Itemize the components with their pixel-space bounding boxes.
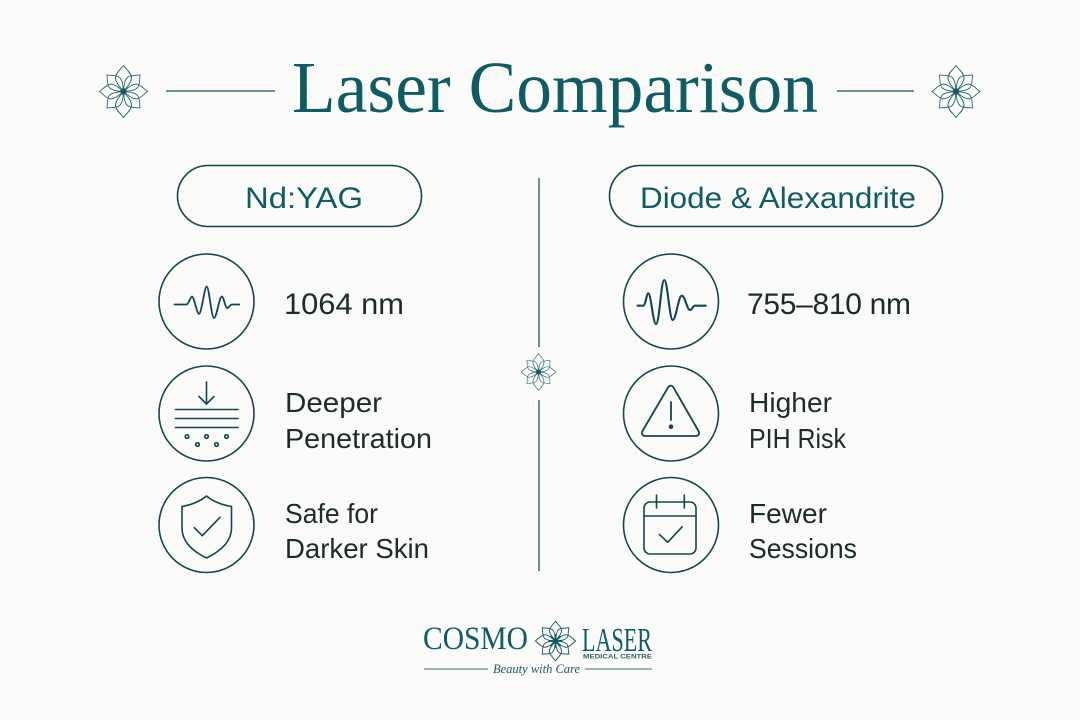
text: Deeper Penetration bbox=[285, 387, 432, 454]
text: Higher PIH Risk: Higher bbox=[749, 387, 832, 418]
text: Safe for Darker Skin: Safe for bbox=[285, 498, 378, 529]
icon: logo flower bbox=[535, 621, 576, 661]
logo wordmark: LASER: LASER bbox=[582, 622, 652, 659]
text: Fewer Sessions bbox=[749, 498, 857, 564]
logo tagline: Beauty with Care bbox=[493, 662, 580, 676]
text: Fewer Sessions: Fewer bbox=[749, 498, 827, 529]
text: Higher PIH Risk bbox=[749, 387, 847, 454]
icon: calendar with check bbox=[624, 478, 718, 572]
text: Higher PIH Risk: PIH Risk bbox=[749, 423, 847, 454]
icon: centre flower bbox=[521, 354, 556, 390]
text: 1064 nm: 1064 nm bbox=[284, 288, 404, 321]
logo wordmark: COSMO: COSMO bbox=[423, 621, 528, 657]
icon: shield with check bbox=[159, 478, 254, 572]
heading pill: Diode & Alexandrite: Diode & Alexandrite bbox=[640, 182, 916, 215]
panel: Diode and Alexandrite column bbox=[610, 166, 942, 572]
logo bbox=[423, 621, 653, 676]
icon: warning triangle bbox=[624, 366, 718, 461]
logo subtitle: MEDICAL CENTRE bbox=[583, 654, 653, 660]
right title rule bbox=[837, 90, 914, 92]
icon: large waveform bbox=[624, 254, 718, 349]
text: Fewer Sessions: Sessions bbox=[749, 533, 857, 564]
text: Safe for Darker Skin bbox=[285, 498, 429, 564]
text: 755–810 nm: 755–810 nm bbox=[747, 288, 911, 321]
left title rule bbox=[166, 90, 275, 92]
panel: Nd:YAG column bbox=[159, 166, 432, 572]
heading pill: Nd:YAG bbox=[178, 166, 422, 226]
title: Laser Comparison bbox=[292, 47, 818, 128]
heading pill: Diode & Alexandrite bbox=[610, 166, 942, 226]
icon: right title flower bbox=[932, 66, 980, 118]
icon: left title flower bbox=[100, 66, 147, 118]
heading pill: Nd:YAG: Nd:YAG bbox=[245, 182, 363, 215]
icon: small waveform bbox=[159, 254, 254, 349]
text: Safe for Darker Skin: Darker Skin bbox=[285, 533, 429, 564]
icon: skin layers with arrow bbox=[159, 366, 254, 461]
centre divider bbox=[521, 178, 556, 571]
text: Deeper Penetration: Deeper bbox=[285, 387, 382, 418]
text: Deeper Penetration: Penetration bbox=[285, 423, 432, 454]
